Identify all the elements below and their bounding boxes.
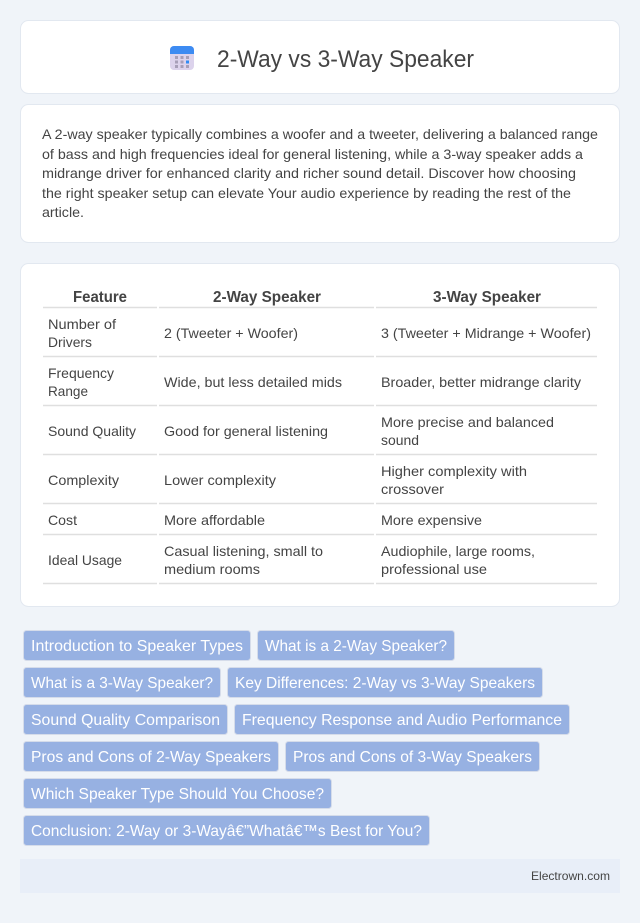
panel: topic tags xyxy=(24,630,570,846)
tag: conclusion xyxy=(24,816,430,846)
table row: ideal usage: Casual listening, small to xyxy=(164,543,323,559)
table row: cost: Cost xyxy=(48,512,77,528)
tag: introduction: Introduction to Speaker Types xyxy=(31,638,243,655)
table row: number of drivers: 2 (Tweeter + Woofer) xyxy=(164,325,298,341)
table header row xyxy=(73,289,541,306)
tag: which speaker type: Which Speaker Type Should You Choose? xyxy=(31,786,324,803)
tag: what is a 3-way speaker xyxy=(24,668,220,698)
text block: introduction paragraph: the right speaker setup can elevate Your audio experience by reading the rest of the xyxy=(42,185,571,201)
table row: sound quality xyxy=(48,414,554,448)
table row: complexity: Complexity xyxy=(48,472,119,488)
table row: ideal usage: Ideal Usage xyxy=(48,552,122,568)
table row: number of drivers: 3 (Tweeter + Midrange + Woofer) xyxy=(381,325,591,341)
table row: number of drivers: Number of xyxy=(48,316,116,332)
tag: sound quality comparison: Sound Quality Comparison xyxy=(31,712,220,729)
table header row: Feature xyxy=(73,289,127,306)
tag: sound quality comparison xyxy=(24,704,228,734)
tag: key differences xyxy=(228,668,542,698)
title: 2-Way vs 3-Way Speaker xyxy=(217,46,474,73)
tag: introduction xyxy=(24,630,250,660)
table row: ideal usage: Audiophile, large rooms, xyxy=(381,543,535,559)
text block: introduction paragraph xyxy=(42,126,598,220)
table row: ideal usage: professional use xyxy=(381,561,487,577)
tag: conclusion: Conclusion: 2-Way or 3-Wayâ€”Whatâ€™s Best for You? xyxy=(31,823,422,840)
table row: sound quality: Good for general listening xyxy=(164,423,328,439)
panel: comparison table xyxy=(20,264,620,606)
tag: what is a 2-way speaker xyxy=(258,630,454,660)
tag: what is a 2-way speaker: What is a 2-Way Speaker? xyxy=(265,638,447,655)
footer text: Electrown.com xyxy=(531,869,610,883)
table row: ideal usage xyxy=(48,543,535,577)
text block: introduction paragraph: of bass and high frequencies ideal for general listening, while a 3-way speaker adds a xyxy=(42,146,583,162)
table row: complexity: crossover xyxy=(381,481,444,497)
table row: sound quality: More precise and balanced xyxy=(381,414,554,430)
table row: number of drivers xyxy=(48,316,591,350)
tag: pros and cons of 2-way xyxy=(24,742,278,772)
table header row: 2-Way Speaker xyxy=(213,289,321,306)
table row: frequency range xyxy=(48,365,581,399)
tag: key differences: Key Differences: 2-Way vs 3-Way Speakers xyxy=(235,675,535,692)
table row: ideal usage: medium rooms xyxy=(164,561,260,577)
tag: pros and cons of 3-way xyxy=(286,742,540,772)
text block: introduction paragraph: article. xyxy=(42,204,84,220)
tag: which speaker type xyxy=(24,778,332,808)
tag: what is a 3-way speaker: What is a 3-Way Speaker? xyxy=(31,675,213,692)
table row: frequency range: Frequency xyxy=(48,365,114,381)
table header row: 3-Way Speaker xyxy=(433,289,541,306)
table row: complexity: Higher complexity with xyxy=(381,463,527,479)
text block: introduction paragraph: midrange driver for enhanced clarity and richer sound detail. Discover how choosing xyxy=(42,165,576,181)
panel: header xyxy=(20,20,620,94)
icon: calendar xyxy=(170,46,194,70)
table row: frequency range: Wide, but less detailed mids xyxy=(164,374,342,390)
table row: cost: More affordable xyxy=(164,512,265,528)
tag: pros and cons of 3-way: Pros and Cons of 3-Way Speakers xyxy=(293,749,532,766)
table row: sound quality: Sound Quality xyxy=(48,423,136,439)
panel: introduction xyxy=(20,104,620,242)
table row: sound quality: sound xyxy=(381,432,419,448)
table row: cost: More expensive xyxy=(381,512,482,528)
tag: pros and cons of 2-way: Pros and Cons of 2-Way Speakers xyxy=(31,749,271,766)
table row: number of drivers: Drivers xyxy=(48,334,92,350)
table row: complexity: Lower complexity xyxy=(164,472,276,488)
text block: introduction paragraph: A 2-way speaker typically combines a woofer and a tweeter, delivering a balanced range xyxy=(42,126,598,142)
table row: complexity xyxy=(48,463,527,497)
tag: frequency response xyxy=(234,704,570,734)
table row: frequency range: Broader, better midrange clarity xyxy=(381,374,581,390)
panel: footer xyxy=(20,859,620,893)
tag: frequency response: Frequency Response and Audio Performance xyxy=(242,712,562,729)
table row: frequency range: Range xyxy=(48,383,88,399)
table row: cost xyxy=(48,512,482,528)
